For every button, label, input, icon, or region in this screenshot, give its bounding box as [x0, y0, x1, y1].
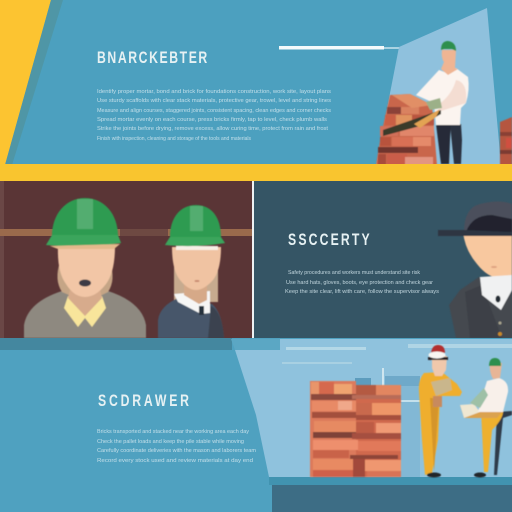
- heading: bottom: SCDRAWER: [98, 392, 192, 411]
- worker: man in dark hat: [438, 202, 512, 338]
- worker: right woman: [158, 205, 225, 338]
- illustration: bricklayer with wall: [376, 41, 512, 165]
- buttons: [498, 322, 502, 324]
- light blue background wedge: [235, 339, 512, 477]
- text block: bottom: Record every stock used and review materials at day end: [97, 458, 253, 464]
- wall band: [0, 229, 252, 236]
- yellow corner wedge: [0, 0, 51, 165]
- text block: top: Spread mortar evenly on each course, press bricks firmly, tap to level, check plumb walls: [97, 117, 328, 123]
- nose: [491, 266, 497, 268]
- row 2: [312, 401, 356, 411]
- shoes: [427, 472, 441, 478]
- worker: yellow jumpsuit: [419, 345, 462, 478]
- long hair: [174, 262, 218, 302]
- brick pallet stack: [310, 381, 401, 477]
- row 5: [313, 459, 353, 470]
- white rule: [279, 46, 384, 50]
- neck: [68, 290, 102, 316]
- teal diagonal band: [5, 0, 63, 165]
- face: [58, 246, 115, 297]
- text block: bottom: Carefully coordinate deliveries with the mason and laborers team: [97, 448, 256, 454]
- face: [172, 247, 221, 290]
- jacket: [158, 298, 224, 338]
- panel: top section: [0, 0, 512, 165]
- top strip: [0, 338, 232, 350]
- shoes: [474, 472, 486, 478]
- sweater: [24, 291, 146, 338]
- white vertical divider: [252, 181, 254, 338]
- panel: dark section: [254, 181, 512, 338]
- board: [460, 405, 503, 418]
- person: head: [441, 50, 458, 75]
- text block: dark panel: Keep the site clear, lift with care, follow the supervisor always: [285, 289, 440, 295]
- head: [432, 356, 447, 376]
- heading: top: BNARCKEBTER: [97, 49, 209, 68]
- shirt: [478, 378, 508, 412]
- heading: dark panel: SSCCERTY: [288, 231, 372, 250]
- text block: top: Use sturdy scaffolds with clear stack materials, protective gear, trowel, level and string lines: [97, 98, 332, 104]
- panel: bottom section: [0, 338, 512, 512]
- text block: top: Measure and align courses, staggered joints, consistent spacing, clean edges and corner checks: [97, 108, 332, 114]
- person: trousers: [436, 124, 462, 164]
- green helmet: [165, 205, 225, 246]
- text block: dark panel: Use hard hats, gloves, boots, eye protection and check gear: [286, 280, 433, 286]
- brick wall: [376, 94, 437, 165]
- person: green hard hat: [441, 41, 456, 51]
- text block: top: Finish with inspection, cleaning and storage of the tools and materials: [97, 136, 251, 142]
- row 4: [313, 440, 358, 450]
- background streaks: [286, 347, 366, 350]
- yellow trousers: [481, 410, 503, 472]
- collar: [64, 296, 106, 327]
- worker: left woman: [24, 198, 146, 338]
- mouth: [194, 280, 200, 282]
- text block: dark panel: [285, 270, 440, 295]
- panel: workers on brown: [0, 181, 252, 338]
- text block: top: [97, 89, 332, 142]
- face: [463, 232, 512, 278]
- headband: [176, 246, 218, 250]
- dark leg: [494, 411, 512, 475]
- santa style hat: [431, 345, 445, 353]
- text block: bottom: [97, 429, 256, 464]
- white collar: [480, 275, 512, 310]
- neck: [184, 280, 207, 304]
- text block: bottom: Check the pallet loads and keep the pile stable while moving: [97, 439, 244, 445]
- green helmet: [46, 198, 121, 246]
- hat: [464, 202, 512, 232]
- jacket: [449, 277, 512, 338]
- trowel and board: [383, 110, 441, 136]
- jumpsuit: [419, 372, 462, 475]
- shadow crease: [430, 398, 439, 472]
- head: [490, 363, 502, 379]
- mouth: [79, 280, 91, 286]
- green hat: [489, 358, 501, 366]
- person: shirt: [416, 68, 469, 125]
- light blue beam: [376, 8, 501, 165]
- row 3: [314, 421, 356, 432]
- text block: top: Strike the joints before drying, remove excess, allow curing time, protect from rain and frost: [97, 126, 329, 132]
- text block: bottom: Bricks transported and stacked near the working area each day: [97, 429, 250, 435]
- folded arms: [431, 378, 452, 396]
- yellow divider band: [0, 164, 512, 182]
- text block: dark panel: Safety procedures and workers must understand site risk: [288, 270, 421, 276]
- right brick stack: [500, 117, 512, 165]
- hair: [57, 262, 113, 298]
- worker: holding board: [460, 358, 512, 478]
- white collar: [174, 291, 210, 314]
- row 1: [311, 382, 319, 394]
- text block: top: Identify proper mortar, bond and brick for foundations construction, work site, layout plans: [97, 89, 332, 95]
- floor: [269, 477, 512, 485]
